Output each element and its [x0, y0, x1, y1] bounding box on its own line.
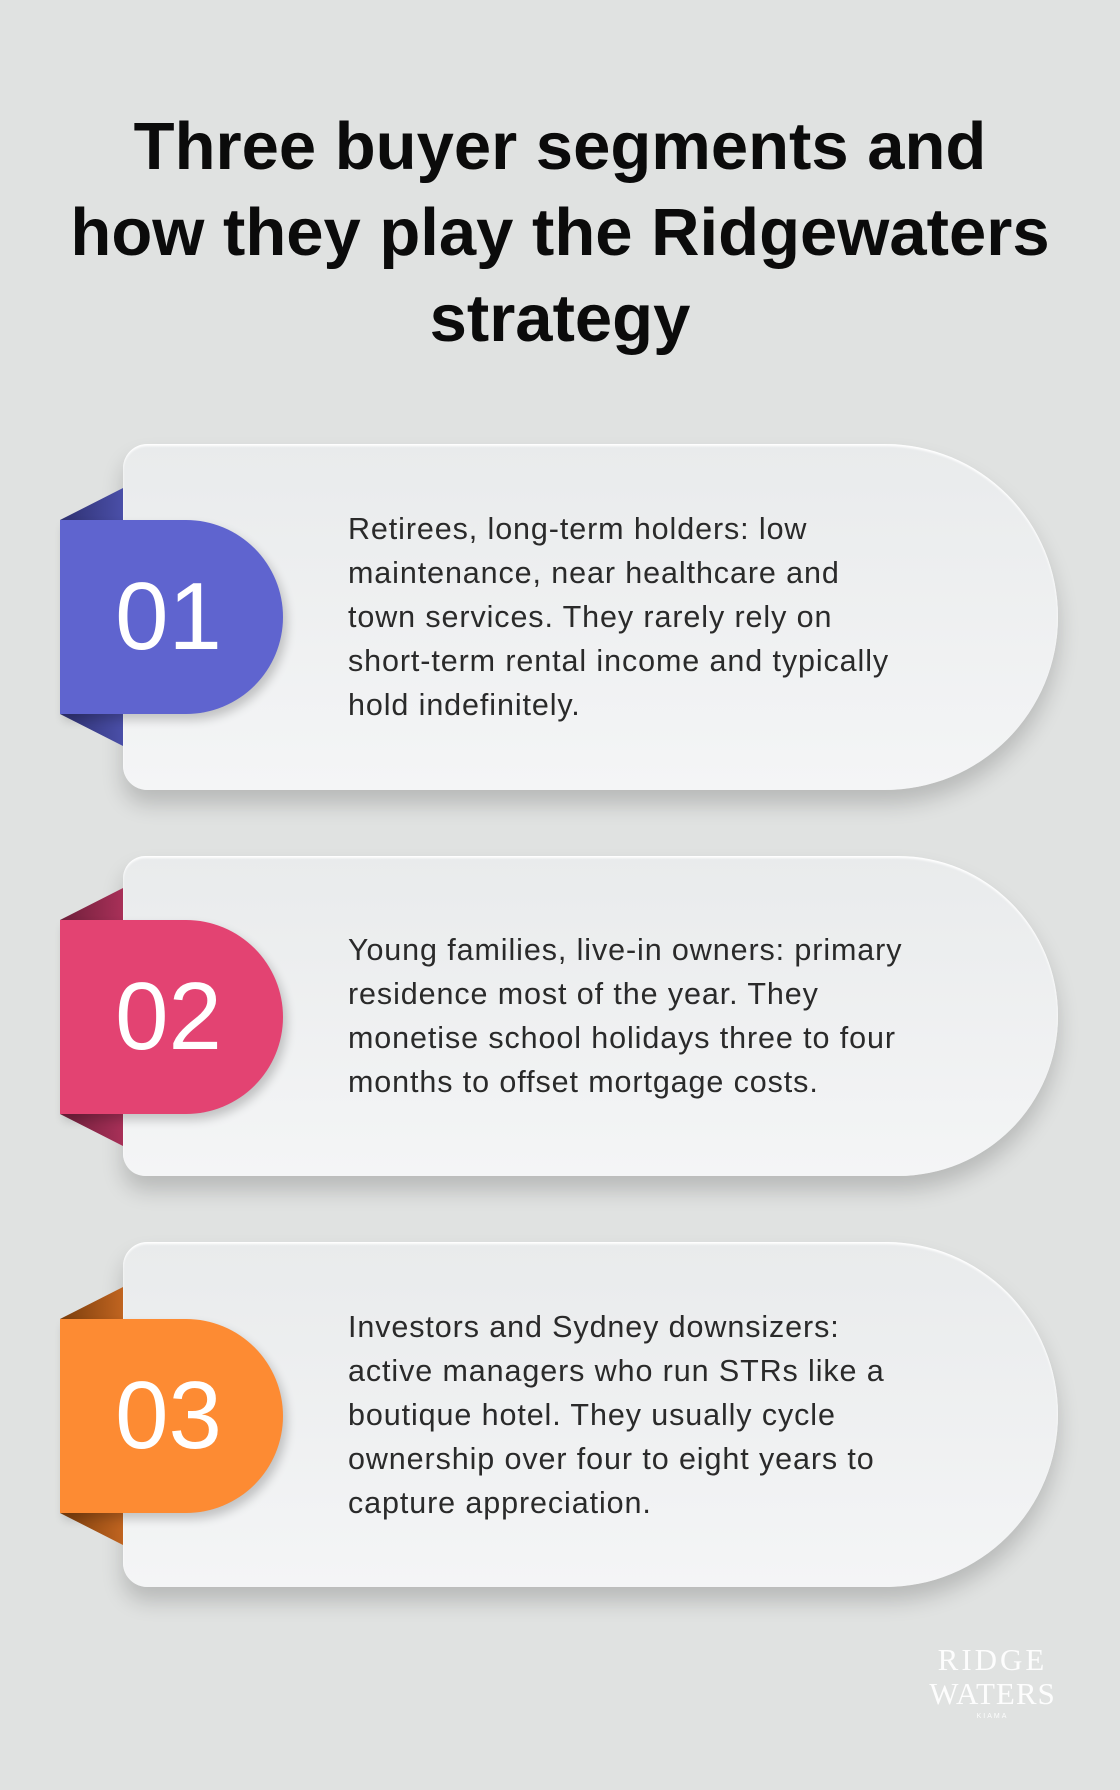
number 03 [60, 1319, 283, 1513]
text 3 [348, 1310, 885, 1520]
text 3: active managers who run STRs like a [348, 1354, 885, 1388]
text 1: hold indefinitely. [348, 688, 581, 722]
number 02 [60, 920, 283, 1114]
text 1: Retirees, long-term holders: low [348, 512, 807, 546]
card 1 background [123, 444, 1058, 790]
text 3: capture appreciation. [348, 1486, 652, 1520]
text 3: boutique hotel. They usually cycle [348, 1398, 836, 1432]
badge 03 [60, 1287, 292, 1545]
title [70, 109, 1050, 356]
number 01 [60, 520, 283, 714]
badge 02 [60, 888, 292, 1146]
title: how they play the Ridgewaters [70, 195, 1050, 270]
logo: RIDGE [938, 1642, 1047, 1677]
card 3 background [123, 1242, 1058, 1587]
flap top [60, 1287, 123, 1319]
text 1: town services. They rarely rely on [348, 600, 832, 634]
logo [929, 1642, 1056, 1720]
badge 01 [60, 488, 292, 746]
flap bottom [60, 714, 123, 746]
text 3: ownership over four to eight years to [348, 1442, 875, 1476]
card 2 background [123, 856, 1058, 1176]
text 1 [348, 512, 889, 722]
flap top [60, 888, 123, 920]
number 03: 03 [115, 1362, 222, 1469]
flap top [60, 488, 123, 520]
text 1: short-term rental income and typically [348, 644, 889, 678]
text 2 [348, 933, 902, 1099]
number 01: 01 [115, 563, 222, 670]
title: strategy [430, 281, 690, 356]
logo: WATERS [929, 1676, 1056, 1711]
text 2: residence most of the year. They [348, 977, 819, 1011]
logo: KIAMA [977, 1713, 1008, 1720]
text 2: months to offset mortgage costs. [348, 1065, 819, 1099]
number 02: 02 [115, 963, 222, 1070]
text 2: monetise school holidays three to four [348, 1021, 896, 1055]
title: Three buyer segments and [134, 109, 986, 184]
text 2: Young families, live-in owners: primary [348, 933, 902, 967]
text 3: Investors and Sydney downsizers: [348, 1310, 840, 1344]
flap bottom [60, 1513, 123, 1545]
text 1: maintenance, near healthcare and [348, 556, 840, 590]
flap bottom [60, 1114, 123, 1146]
